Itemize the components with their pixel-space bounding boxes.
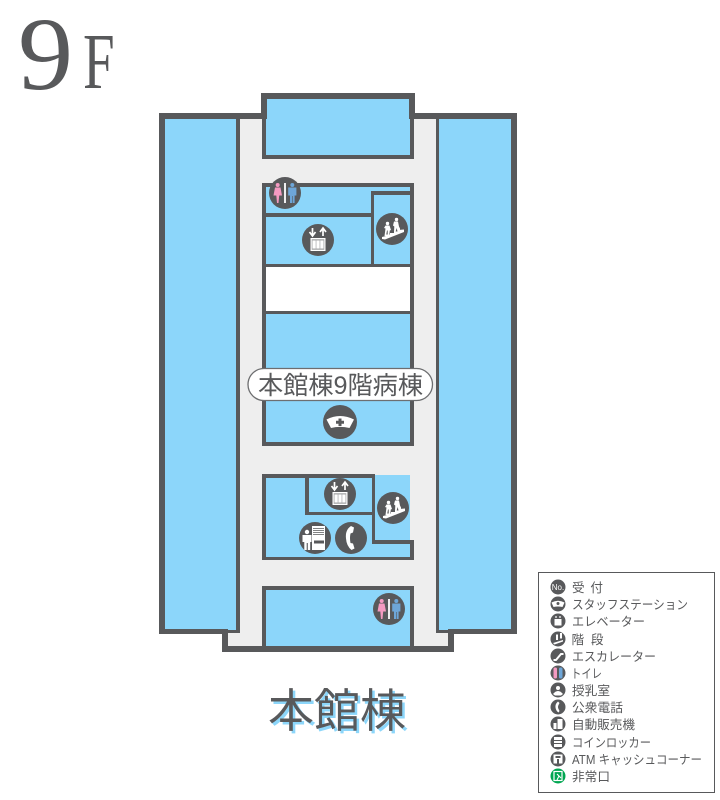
corridor xyxy=(228,119,448,646)
panel: left wing xyxy=(159,113,240,634)
legend: nursing room: 授乳室 xyxy=(572,684,610,698)
panel: bottom block xyxy=(262,586,414,648)
label: ward name: 本館棟9階病棟 xyxy=(258,372,423,400)
legend: public phone: 公衆電話 xyxy=(572,701,623,715)
legend: reception: No. xyxy=(552,583,564,592)
legend: emergency exit xyxy=(550,768,610,784)
legend: reception: 受 付 xyxy=(572,581,603,595)
legend: restroom: トイレ xyxy=(571,667,602,681)
icon: stairs lower xyxy=(377,492,409,524)
panel: bottom wing wall xyxy=(222,629,454,652)
legend: stairs: 階 段 xyxy=(572,633,604,647)
legend: reception xyxy=(550,580,603,595)
building name: 本館棟 xyxy=(270,688,408,740)
icon: restroom upper xyxy=(269,177,301,209)
legend: nursing room xyxy=(550,682,610,698)
panel: central block upper xyxy=(262,183,414,446)
floor number: 9F: F xyxy=(83,18,115,105)
panel: top block xyxy=(261,93,415,159)
legend: escalator xyxy=(550,648,656,664)
building name: 本館棟 xyxy=(268,685,406,737)
legend: emergency exit: 非常口 xyxy=(572,770,610,784)
legend: stairs xyxy=(550,632,604,647)
legend: escalator: エスカレーター xyxy=(572,650,656,664)
legend: staff station: スタッフステーション xyxy=(572,598,688,612)
icon: nurse station xyxy=(323,405,357,439)
legend: vending machine: 自動販売機 xyxy=(572,717,635,732)
icon: public phone xyxy=(335,522,367,554)
legend: coin locker xyxy=(550,734,651,750)
legend: elevator: エレベーター xyxy=(572,615,645,629)
legend: coin locker: コインロッカー xyxy=(572,736,651,750)
legend xyxy=(538,572,714,792)
floor plan xyxy=(159,93,517,652)
legend frame xyxy=(538,572,714,792)
legend: restroom xyxy=(550,666,602,681)
icon: stairs upper xyxy=(376,213,408,245)
floor number: 9F: 9 xyxy=(18,0,73,112)
legend: ATM corner: ATM キャッシュコーナー xyxy=(572,753,702,767)
icon: vending machine xyxy=(299,522,331,554)
panel: right wing xyxy=(436,113,517,634)
top corridor wall xyxy=(240,113,436,119)
legend: vending machine xyxy=(550,716,635,732)
legend: elevator xyxy=(550,614,645,629)
floor number: 9F xyxy=(18,0,115,112)
panel: central block lower xyxy=(262,474,414,560)
legend: public phone xyxy=(550,700,623,715)
icon: elevator lower xyxy=(324,478,356,510)
icon: restroom lower xyxy=(373,593,405,625)
icon: elevator upper xyxy=(302,224,334,256)
